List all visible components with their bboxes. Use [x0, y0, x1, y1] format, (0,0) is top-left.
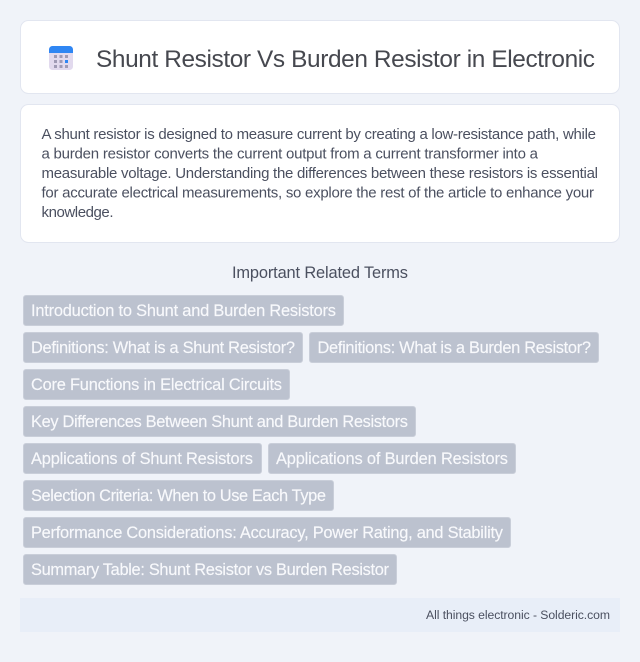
panel: related term chips: [24, 296, 598, 584]
footer credit: All things electronic - Solderic.com: [426, 608, 610, 622]
chip: shunt definition: Definitions: What is a Shunt Resistor?: [31, 339, 295, 357]
chip: performance considerations: [24, 518, 510, 548]
heading: important related terms: Important Related Terms: [232, 264, 408, 282]
chip: shunt applications: Applications of Shunt Resistors: [31, 450, 253, 468]
chip: burden definition: Definitions: What is a Burden Resistor?: [318, 339, 591, 357]
chip: burden definition: [310, 332, 598, 362]
chip: introduction: [24, 296, 344, 326]
chip: burden applications: [268, 444, 516, 474]
title: Shunt Resistor Vs Burden Resistor in Electronic: [96, 46, 595, 73]
footer: [20, 598, 620, 632]
text block: intro paragraph: A shunt resistor is designed to measure current by creating a low-resistance path, while: [42, 126, 596, 143]
chip: introduction: Introduction to Shunt and Burden Resistors: [31, 302, 336, 320]
chip: summary table: [24, 554, 396, 584]
chip: core functions: [24, 370, 290, 400]
panel: title card: [20, 20, 620, 94]
chip: key differences: [24, 406, 416, 436]
chip: summary table: Summary Table: Shunt Resistor vs Burden Resistor: [31, 561, 390, 579]
panel: intro paragraph card: [20, 104, 620, 242]
chip: selection criteria: Selection Criteria: When to Use Each Type: [31, 487, 326, 505]
chip: shunt definition: [24, 332, 302, 362]
chip: shunt applications: [24, 444, 262, 474]
chip: core functions: Core Functions in Electrical Circuits: [31, 376, 282, 394]
text block: intro paragraph: a burden resistor converts the current output from a current transformer into a: [42, 146, 539, 162]
text block: intro paragraph: knowledge.: [42, 204, 114, 221]
text block: intro paragraph: for accurate electrical measurements, so explore the rest of the article to enhance your: [42, 184, 594, 202]
chip: performance considerations: Performance Considerations: Accuracy, Power Rating, and Stability: [31, 524, 504, 542]
text block: intro paragraph: measurable voltage. Understanding the differences between these resistors is essential: [42, 165, 598, 182]
chip: burden applications: Applications of Burden Resistors: [276, 450, 508, 468]
chip: key differences: Key Differences Between Shunt and Burden Resistors: [31, 413, 408, 431]
chip: selection criteria: [24, 480, 334, 510]
icon: calendar: [49, 46, 73, 70]
text block: intro paragraph: [42, 126, 598, 221]
